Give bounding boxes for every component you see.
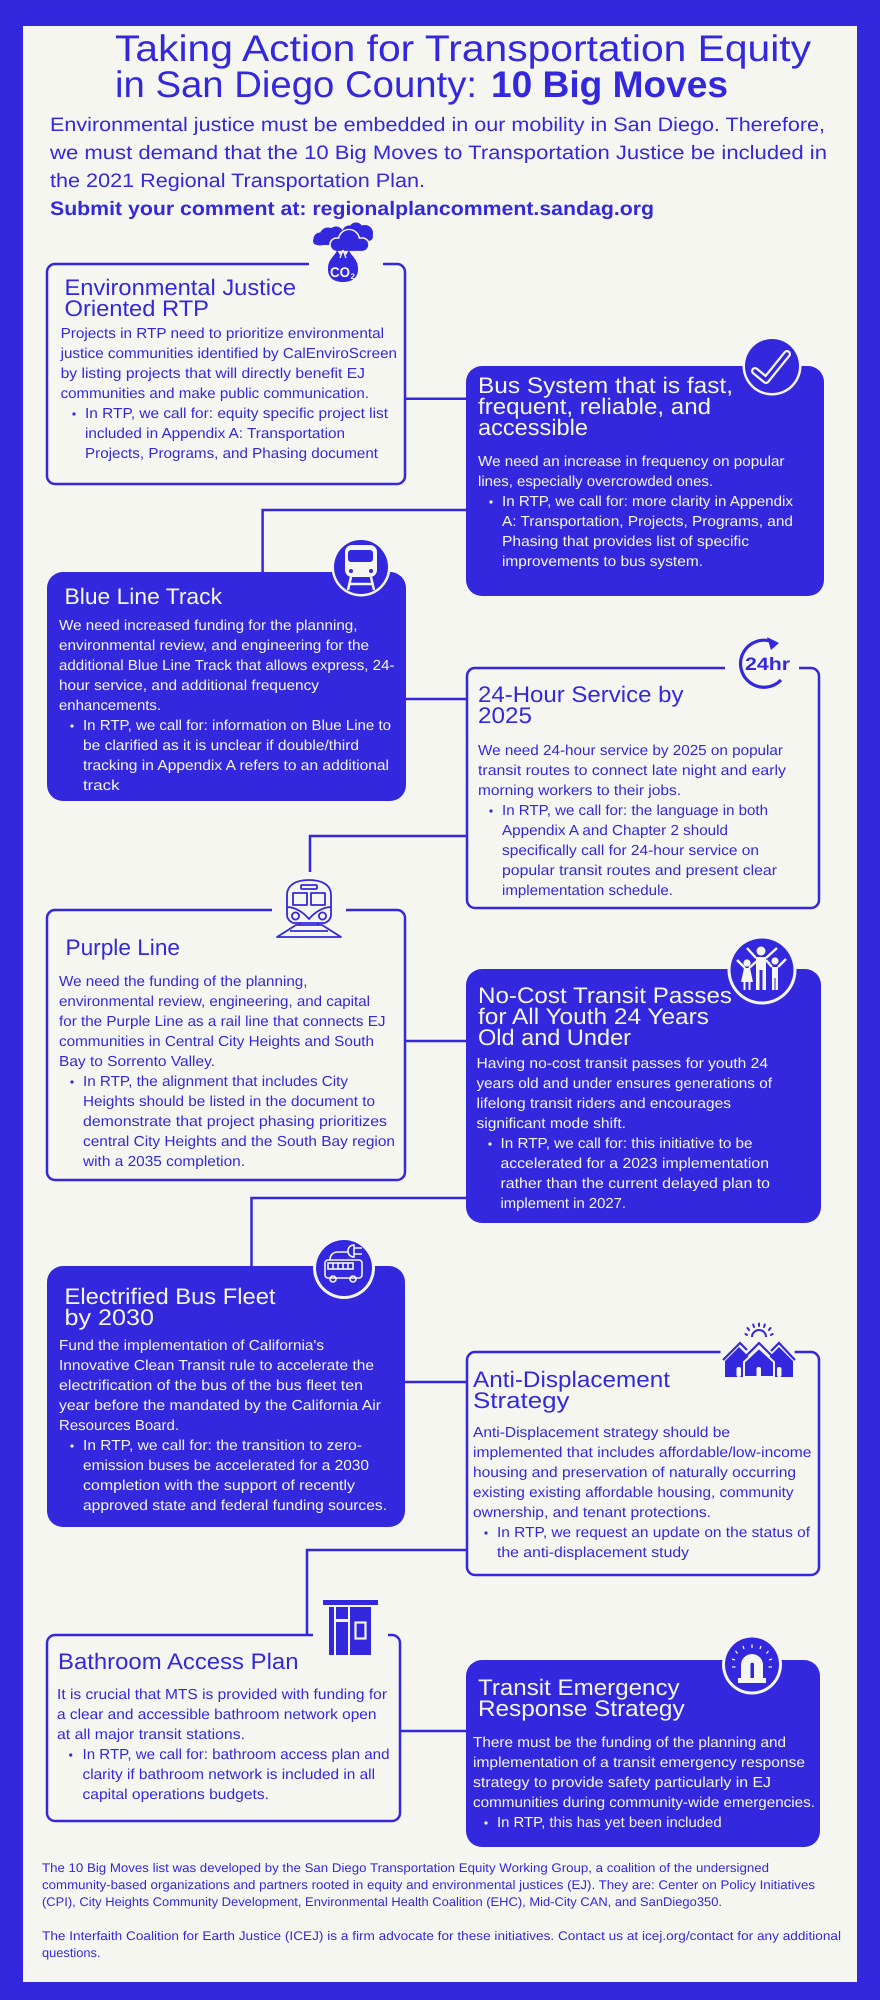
body text: In RTP, this has yet been included — [497, 1815, 722, 1831]
panel: 24-Hour Service — [467, 637, 819, 908]
heading: Blue Line Track — [64, 584, 223, 609]
body text: Having no-cost transit passes for youth 24 — [476, 1056, 768, 1072]
title: in San Diego County: — [115, 64, 477, 105]
intro text: Environmental justice must be embedded in our mobility in San Diego. Therefore, — [50, 114, 825, 136]
body text: tracking in Appendix A refers to an additional — [83, 758, 389, 774]
body text: significant mode shift. — [476, 1116, 626, 1132]
body text: years old and under ensures generations of — [476, 1076, 773, 1092]
footer note: ICEJ contact — [42, 1929, 841, 1960]
panel: Bathroom Access Plan — [47, 1600, 400, 1821]
body text: In RTP, we request an update on the status of — [497, 1525, 811, 1541]
heading: by 2030 — [64, 1305, 154, 1330]
body text: Fund the implementation of California's — [59, 1338, 324, 1354]
heading: for All Youth 24 Years — [478, 1004, 709, 1029]
heading: No-Cost Transit Passes — [478, 983, 732, 1008]
panel: No-Cost Transit Passes — [466, 936, 821, 1223]
body text: rather than the current delayed plan to — [500, 1176, 770, 1192]
body text: Phasing that provides list of specific — [502, 534, 749, 550]
body text: enhancements. — [59, 698, 161, 714]
heading: Environmental Justice — [64, 275, 296, 300]
body text: hour service, and additional frequency — [59, 678, 320, 694]
footer note: ICEJ contact: questions. — [42, 1946, 100, 1960]
body text: communities in Central City Heights and South — [59, 1034, 374, 1050]
icon: restroom stalls — [323, 1600, 378, 1655]
body text: implementation of a transit emergency response — [473, 1755, 805, 1771]
body text: We need 24-hour service by 2025 on popular — [478, 743, 783, 759]
body text: We need the funding of the planning, — [59, 974, 308, 990]
panel: Environmental Justice Oriented RTP — [47, 222, 405, 484]
body text: Appendix A and Chapter 2 should — [502, 823, 728, 839]
heading — [478, 682, 684, 728]
body text: popular transit routes and present clear — [502, 863, 777, 879]
body text — [473, 1425, 812, 1561]
body text: approved state and federal funding sources. — [83, 1498, 387, 1514]
icon: train on tracks — [277, 880, 341, 937]
footer note: working group: (CPI), City Heights Community Development, Environmental Health Coalition (EHC), Mid-City CAN, and SanDiego350. — [42, 1895, 722, 1909]
body text: lifelong transit riders and encourages — [476, 1096, 731, 1112]
heading: Strategy — [473, 1388, 570, 1413]
intro text: Submit your comment at: regionalplancomment.sandag.org — [50, 198, 654, 220]
body text: In RTP, we call for: bathroom access plan and — [82, 1747, 390, 1763]
heading: Response Strategy — [478, 1696, 685, 1721]
heading — [478, 983, 732, 1050]
icon: CO2 clouds — [313, 222, 373, 282]
body text: Heights should be listed in the document to — [83, 1094, 375, 1110]
body text: strategy to provide safety particularly in EJ — [473, 1775, 771, 1791]
intro text: we must demand that the 10 Big Moves to Transportation Justice be included in — [49, 142, 827, 164]
body text: transit routes to connect late night and early — [478, 763, 787, 779]
icon: family with raised arms — [728, 936, 796, 1004]
body text: implemented that includes affordable/low-income — [473, 1445, 812, 1461]
body text: implement in 2027. — [500, 1196, 626, 1212]
body text: for the Purple Line as a rail line that connects EJ — [59, 1014, 386, 1030]
panel: Anti-Displacement Strategy — [467, 1324, 819, 1575]
body text: There must be the funding of the planning and — [473, 1735, 786, 1751]
body text: housing and preservation of naturally occurring — [473, 1465, 796, 1481]
footer note: working group — [42, 1861, 815, 1909]
heading — [478, 1675, 685, 1721]
heading: Bus System that is fast, — [478, 373, 733, 398]
body text: It is crucial that MTS is provided with funding for — [57, 1687, 387, 1703]
heading: Bathroom Access Plan — [58, 1649, 298, 1674]
body text: We need an increase in frequency on popular — [478, 454, 785, 470]
icon: 24hr clock arrow — [741, 637, 790, 687]
body text: implementation schedule. — [502, 883, 673, 899]
intro text — [49, 114, 827, 220]
body text: demonstrate that project phasing prioritizes — [83, 1114, 387, 1130]
body text: completion with the support of recently — [83, 1478, 356, 1494]
heading: accessible — [478, 415, 588, 440]
body text: a clear and accessible bathroom network open — [57, 1707, 376, 1723]
panel: Blue Line Track — [47, 538, 406, 801]
body text: clarity if bathroom network is included in all — [82, 1767, 375, 1783]
body text: included in Appendix A: Transportation — [85, 426, 345, 442]
body text: In RTP, we call for: this initiative to be — [500, 1136, 752, 1152]
title — [115, 28, 812, 105]
body text: In RTP, we call for: the transition to zero- — [83, 1438, 362, 1454]
icon: train front — [332, 538, 390, 596]
body text: by listing projects that will directly benefit EJ — [61, 366, 365, 382]
heading: frequent, reliable, and — [478, 394, 711, 419]
icon: houses with sun — [723, 1324, 795, 1377]
title: Taking Action for Transportation Equity — [115, 28, 812, 69]
body text: communities and make public communication. — [61, 386, 369, 402]
icon: CO2 clouds: CO — [330, 264, 350, 280]
body text: central City Heights and the South Bay region — [83, 1134, 395, 1150]
panel: Transit Emergency Response Strategy — [466, 1634, 820, 1847]
icon: emergency siren — [722, 1634, 782, 1694]
body text: We need increased funding for the planning, — [59, 618, 358, 634]
body text: In RTP, we call for: more clarity in Appendix — [502, 494, 794, 510]
body text: In RTP, we call for: the language in both — [502, 803, 768, 819]
icon: check mark — [742, 336, 802, 396]
heading — [478, 373, 733, 440]
body text — [60, 326, 397, 462]
body text: capital operations budgets. — [82, 1787, 269, 1803]
heading — [64, 1284, 276, 1330]
body text: improvements to bus system. — [502, 554, 703, 570]
panel: Purple Line — [47, 880, 405, 1180]
heading — [64, 275, 296, 321]
body text — [57, 1687, 390, 1803]
heading — [473, 1367, 671, 1413]
body text — [478, 743, 787, 899]
heading: Purple Line — [66, 935, 180, 960]
icon: CO2 clouds: 2 — [350, 272, 356, 281]
panel: Bus System — [466, 336, 824, 596]
body text: with a 2035 completion. — [82, 1154, 245, 1170]
body text: lines, especially overcrowded ones. — [478, 474, 713, 490]
body text: Projects, Programs, and Phasing document — [85, 446, 378, 462]
body text — [478, 454, 794, 570]
body text: additional Blue Line Track that allows express, 24- — [59, 658, 395, 674]
footer note: working group: community-based organizations and partners rooted in equity and environmental justices (EJ). They are: Center on Policy Initiatives — [42, 1878, 815, 1892]
body text: be clarified as it is unclear if double/third — [83, 738, 359, 754]
body text: specifically call for 24-hour service on — [502, 843, 759, 859]
body text: communities during community-wide emergencies. — [473, 1795, 815, 1811]
body text: track — [83, 778, 120, 794]
body text: justice communities identified by CalEnviroScreen — [60, 346, 397, 362]
body text: the anti-displacement study — [497, 1545, 690, 1561]
heading: 24-Hour Service by — [478, 682, 684, 707]
title: 10 Big Moves — [491, 64, 728, 105]
body text — [59, 974, 395, 1170]
body text — [59, 1338, 387, 1514]
body text: existing existing affordable housing, community — [473, 1485, 794, 1501]
body text: A: Transportation, Projects, Programs, and — [502, 514, 793, 530]
footer note: ICEJ contact: The Interfaith Coalition for Earth Justice (ICEJ) is a firm advocate for these initiatives. Contact us at icej.org/contact for any additional — [42, 1929, 841, 1943]
body text: environmental review, engineering, and capital — [59, 994, 370, 1010]
intro text: the 2021 Regional Transportation Plan. — [50, 170, 425, 192]
body text: emission buses be accelerated for a 2030 — [83, 1458, 369, 1474]
panel: Electrified Bus Fleet — [47, 1237, 405, 1527]
footer note: working group: The 10 Big Moves list was developed by the San Diego Transportation Equity Working Group, a coalition of the undersigned — [42, 1861, 769, 1875]
body text: In RTP, we call for: information on Blue Line to — [83, 718, 391, 734]
body text: Bay to Sorrento Valley. — [59, 1054, 215, 1070]
body text — [473, 1735, 815, 1831]
icon: 24hr clock arrow: 24hr — [745, 654, 790, 674]
body text — [476, 1056, 773, 1212]
body text: Innovative Clean Transit rule to accelerate the — [59, 1358, 374, 1374]
body text: ownership, and tenant protections. — [473, 1505, 711, 1521]
heading: 2025 — [478, 703, 532, 728]
heading: Old and Under — [478, 1025, 632, 1050]
body text: Projects in RTP need to prioritize environmental — [61, 326, 384, 342]
body text: year before the mandated by the California Air — [59, 1398, 381, 1414]
body text: In RTP, we call for: equity specific project list — [85, 406, 388, 422]
heading: Electrified Bus Fleet — [64, 1284, 276, 1309]
body text: electrification of the bus of the bus fleet ten — [59, 1378, 363, 1394]
body text: Anti-Displacement strategy should be — [473, 1425, 730, 1441]
body text: morning workers to their jobs. — [478, 783, 681, 799]
heading: Transit Emergency — [478, 1675, 680, 1700]
body text: accelerated for a 2023 implementation — [500, 1156, 769, 1172]
body text: Resources Board. — [59, 1418, 179, 1434]
icon: electric bus with plug — [313, 1237, 375, 1299]
body text: environmental review, and engineering for the — [59, 638, 369, 654]
body text: at all major transit stations. — [57, 1727, 245, 1743]
connectors between panels — [252, 399, 467, 1731]
heading: Anti-Displacement — [473, 1367, 671, 1392]
heading: Oriented RTP — [64, 296, 209, 321]
body text: In RTP, the alignment that includes City — [83, 1074, 349, 1090]
body text — [59, 618, 395, 794]
